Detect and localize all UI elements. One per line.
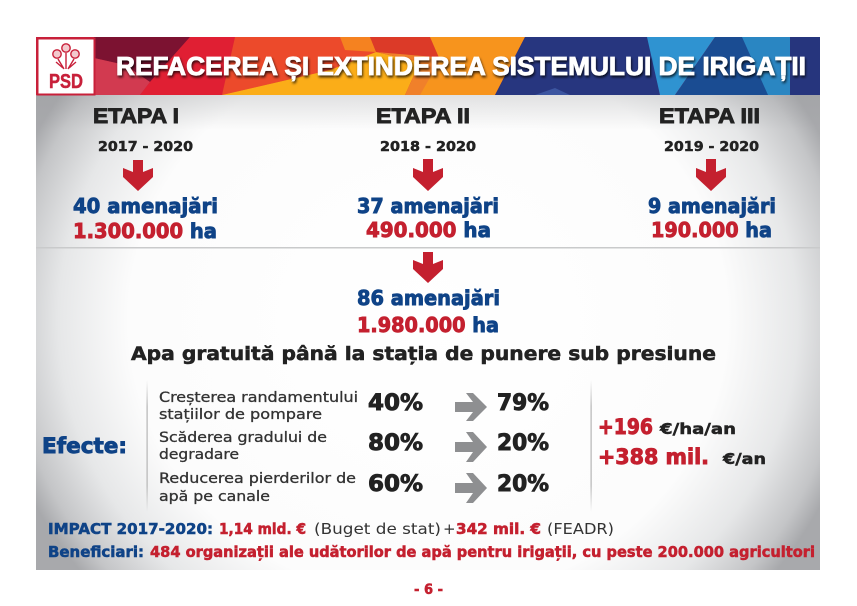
gain per year: +388 mil. [598,445,709,469]
effect label 3: apă pe canale [159,489,270,505]
area: 1.980.000 ha: 1.980.000 ha [357,313,499,337]
impact line: (Buget de stat) [314,520,441,538]
arrow: down [413,252,443,283]
banner: polygon header [36,37,820,95]
impact line: (FEADR) [547,520,614,538]
impact line: 1,14 mld. € [219,520,306,538]
area: 190.000 ha: 190.000 ha [651,218,772,242]
impact line: IMPACT 2017-2020: [48,520,213,538]
effect label 2: Scăderea gradului de [159,430,327,446]
page number: - 6 - [414,582,443,598]
impact line: + [443,520,456,538]
gain per hectare: +196 [598,415,653,439]
count: 86 amenajări: 86 amenajări [357,286,500,310]
arrow: down [123,160,153,191]
heading: etapa I: ETAPA I [93,104,179,128]
effect label 2 [159,430,327,463]
years: 2018-2020: 2018 - 2020 [380,139,476,155]
beneficiaries line: Beneficiari: [48,543,144,561]
arrow: down [413,159,443,191]
arrow: right [455,473,487,503]
beneficiaries line: 484 organizații ale udătorilor de apă pentru irigații, cu peste 200.000 agricultori [150,543,815,561]
title: REFACEREA ȘI EXTINDEREA SISTEMULUI DE IRIGAȚII [116,53,806,81]
value: 40%: 40% [368,391,423,416]
icon: roses [53,44,79,69]
arrow: right [455,393,487,421]
area: 1.300.000 ha: 1.300.000 ha [73,219,217,243]
gains: €/ha/an [659,420,736,438]
value: 20%: 20% [497,472,549,497]
total block [357,252,500,337]
years: 2019-2020: 2019 - 2020 [664,139,759,155]
stage 3 [648,104,776,242]
stage 2 [357,104,499,242]
count: 40 amenajări: 40 amenajări [73,194,218,218]
gains: €/an [722,450,766,468]
value: 80%: 80% [368,431,423,456]
panel: gray background [36,95,820,570]
count: 37 amenajări: 37 amenajări [357,194,499,218]
years: 2017-2020: 2017 - 2020 [98,139,193,155]
logo: PSD rose [38,38,94,94]
value: 60%: 60% [368,472,423,497]
effect label 2: degradare [159,447,239,463]
effects table [159,390,549,505]
subheading: Apa gratuită până la stația de punere sub presiune [131,343,716,365]
effect label 3 [159,471,356,505]
impact line: 342 mil. € [456,520,541,538]
count: 9 amenajări: 9 amenajări [648,194,776,218]
effect label 1: stațiilor de pompare [159,407,322,423]
heading: etapa III: ETAPA III [659,104,760,128]
arrow: right [455,432,487,462]
value: 20%: 20% [497,431,549,456]
effect label 1: Creșterea randamentului [159,390,358,406]
effect label 1 [159,390,358,423]
impact line [48,520,614,538]
area: 490.000 ha: 490.000 ha [366,218,491,242]
effects label: Efecte: [42,434,127,458]
logo text: PSD [49,70,83,93]
stage 1 [73,104,218,243]
heading: etapa II: ETAPA II [376,104,470,128]
gains [598,415,766,469]
arrow: down [696,159,726,191]
value: 79%: 79% [497,391,549,416]
effect label 3: Reducerea pierderilor de [159,471,356,487]
